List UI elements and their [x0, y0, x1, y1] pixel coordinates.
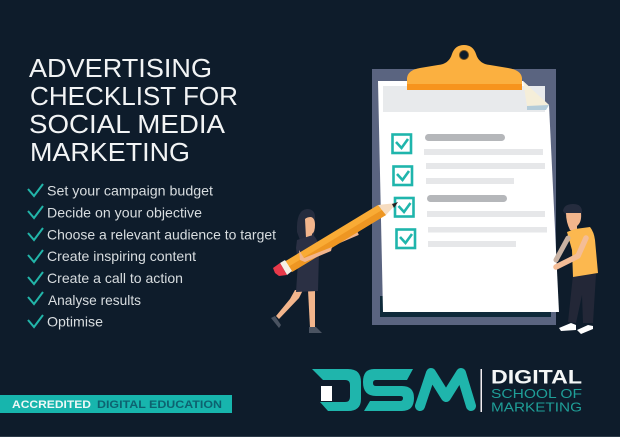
list item: budget: Set your campaign budget — [47, 182, 213, 198]
face — [305, 217, 315, 238]
hair — [563, 204, 582, 215]
checkbox 1 — [392, 134, 411, 153]
checkbox 3 — [395, 198, 414, 216]
accreditation banner: DIGITAL EDUCATION — [97, 399, 222, 411]
arms — [556, 238, 568, 260]
hair — [297, 209, 315, 240]
checkbox 2 — [394, 166, 412, 185]
list item: audience: Choose a relevant audience to target — [47, 226, 276, 242]
logo square — [321, 386, 332, 401]
logo M — [420, 373, 471, 406]
title: ADVERTISING — [29, 53, 212, 83]
woman with pencil — [271, 202, 398, 333]
pencil — [273, 202, 398, 276]
logo S — [363, 369, 414, 411]
list item: objective: Decide on your objective — [47, 204, 202, 220]
logo wordmark: DIGITAL — [491, 368, 582, 388]
title: SOCIAL MEDIA — [29, 109, 226, 139]
clipboard board — [372, 69, 556, 325]
paper sheet — [378, 81, 559, 312]
DSM logo — [312, 368, 582, 414]
logo divider — [480, 369, 482, 412]
title: MARKETING — [30, 137, 190, 167]
paper header band — [383, 86, 545, 112]
list item: analyse: Analyse results — [48, 292, 141, 308]
clipboard illustration — [372, 45, 559, 325]
trousers — [568, 274, 596, 323]
checklist — [28, 182, 276, 330]
accreditation banner: ACCREDITED — [12, 399, 91, 411]
clip — [407, 45, 522, 90]
head — [566, 213, 581, 232]
title: CHECKLIST FOR — [30, 81, 238, 111]
list item: content: Create inspiring content — [47, 248, 196, 264]
checkbox rows — [392, 134, 415, 248]
text placeholder lines — [424, 134, 547, 247]
logo wordmark — [491, 368, 582, 414]
list item: call to action: Create a call to action — [47, 270, 183, 286]
logo wordmark: SCHOOL OF — [491, 386, 582, 401]
back arm — [330, 233, 358, 245]
shoes — [271, 316, 281, 328]
legs — [276, 290, 303, 319]
logo wordmark: MARKETING — [491, 400, 582, 414]
logo D — [312, 369, 361, 411]
hand — [299, 247, 332, 262]
list item: optimise: Optimise — [47, 314, 103, 330]
paper shadow — [380, 296, 551, 317]
accreditation banner — [0, 395, 232, 413]
title — [29, 53, 238, 167]
folded corner — [523, 81, 549, 108]
shoes — [559, 323, 576, 331]
checkbox 4 — [396, 230, 415, 248]
man holding clipboard — [556, 204, 598, 334]
shirt — [567, 227, 598, 277]
dress — [296, 235, 319, 292]
